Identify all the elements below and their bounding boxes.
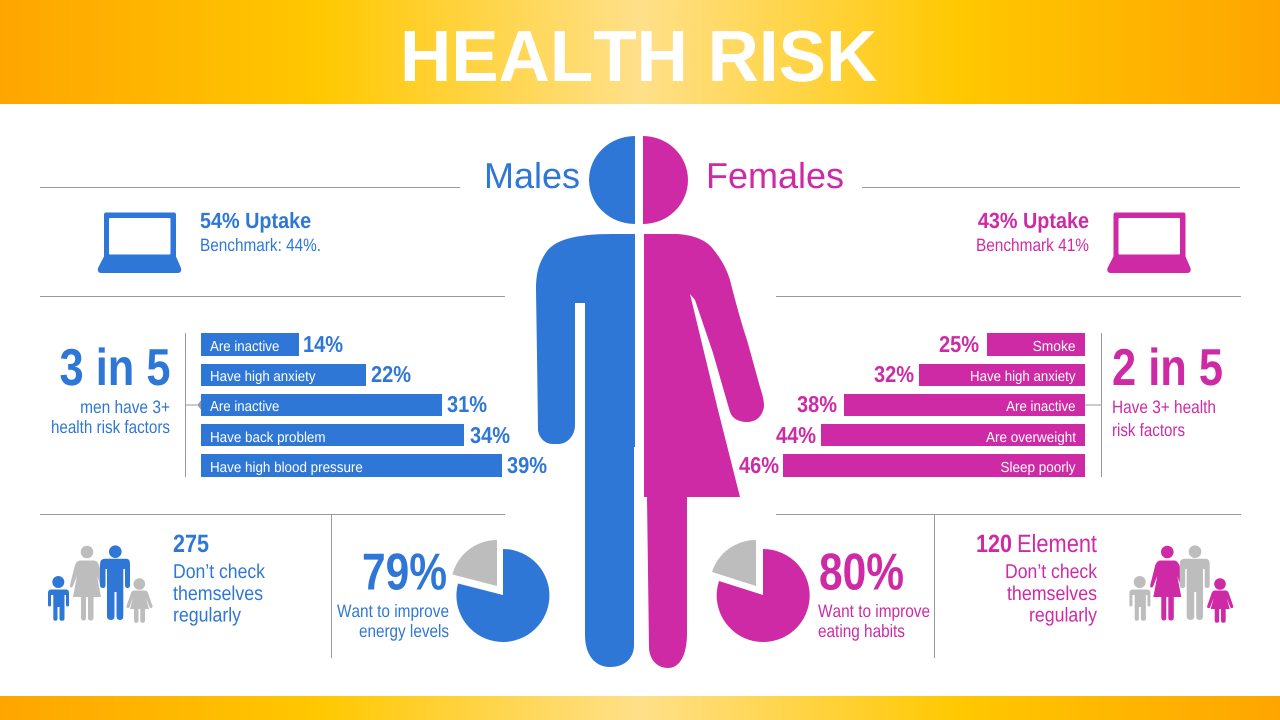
bar: back problem 34%: Have back problem bbox=[210, 430, 326, 446]
connector: female stat to bars bbox=[1085, 404, 1101, 406]
female 2 in 5: 2 in 5 bbox=[1112, 339, 1223, 397]
bar: sleep poorly 46% bbox=[739, 452, 1085, 478]
male pie value: 79% bbox=[362, 544, 447, 602]
bar: are overweight 44%: Are overweight bbox=[986, 430, 1076, 446]
male risk factor stat bbox=[51, 339, 170, 437]
male uptake block bbox=[98, 208, 321, 273]
female count value bbox=[976, 530, 1097, 558]
bar: high anxiety 32% bbox=[874, 361, 1085, 387]
female stat caption bbox=[1112, 397, 1216, 440]
bar: sleep poorly 46%: 46% bbox=[739, 452, 779, 478]
bar: are inactive 31%: 31% bbox=[447, 391, 487, 417]
male count caption: regularly bbox=[173, 604, 241, 626]
header banner bbox=[0, 0, 1280, 104]
female pie block bbox=[712, 540, 930, 642]
heading: Males: Males bbox=[484, 155, 580, 196]
bar: are inactive 38% bbox=[797, 391, 1085, 417]
bar chart: female risk factors bbox=[739, 331, 1085, 478]
female pie value: 80% bbox=[819, 544, 904, 602]
male pie caption: Want to improve bbox=[337, 601, 449, 621]
female count caption bbox=[1005, 561, 1098, 626]
bar: are inactive 31%: Are inactive bbox=[210, 399, 279, 415]
bar: high anxiety 32%: 32% bbox=[874, 361, 914, 387]
bar: high anxiety 22% bbox=[201, 361, 411, 387]
bar: are overweight 44%: 44% bbox=[776, 422, 816, 448]
female count caption: themselves bbox=[1007, 583, 1097, 605]
icon: male family bbox=[48, 545, 153, 623]
male 3 in 5: 3 in 5 bbox=[59, 339, 170, 397]
bar: back problem 34%: 34% bbox=[470, 422, 510, 448]
female count caption: regularly bbox=[1029, 604, 1097, 626]
icon: female laptop bbox=[1107, 212, 1191, 273]
female count caption: Don’t check bbox=[1005, 561, 1098, 583]
figure: female half bbox=[643, 136, 764, 668]
female risk factor stat bbox=[1112, 339, 1223, 440]
male count caption: themselves bbox=[173, 583, 263, 605]
bar: sleep poorly 46%: Sleep poorly bbox=[1001, 460, 1076, 476]
connector: male stat to bars bbox=[186, 401, 201, 409]
icon: female family bbox=[1129, 545, 1233, 623]
bar: high blood pressure 39%: 39% bbox=[507, 452, 547, 478]
bar: smoke 25%: Smoke bbox=[1033, 339, 1076, 355]
icon: male laptop bbox=[98, 212, 181, 273]
female benchmark: Benchmark 41% bbox=[976, 235, 1089, 255]
female count text block bbox=[976, 530, 1098, 626]
bar: are overweight 44% bbox=[776, 422, 1085, 448]
bar: are inactive 31% bbox=[201, 391, 487, 417]
male count text block bbox=[173, 530, 266, 626]
female uptake value: 43% Uptake bbox=[978, 208, 1089, 233]
female uptake block bbox=[976, 208, 1191, 273]
bar: high anxiety 22%: 22% bbox=[371, 361, 411, 387]
title: HEALTH RISK bbox=[400, 17, 877, 97]
bar: are inactive 14% bbox=[201, 331, 343, 357]
bar chart: male risk factors bbox=[201, 331, 547, 478]
bar: high anxiety 22%: Have high anxiety bbox=[210, 369, 316, 385]
male pie caption: energy levels bbox=[359, 621, 449, 641]
male count caption: Don’t check bbox=[173, 561, 266, 583]
male stat caption bbox=[51, 397, 170, 437]
male pie block bbox=[337, 540, 549, 642]
footer banner bbox=[0, 696, 1280, 720]
female pie caption: eating habits bbox=[818, 621, 905, 641]
bar: are inactive 38%: 38% bbox=[797, 391, 837, 417]
bar: are inactive 14%: Are inactive bbox=[210, 339, 279, 355]
bar: are inactive 14%: 14% bbox=[303, 331, 343, 357]
bar: high blood pressure 39% bbox=[201, 452, 547, 478]
female pie caption: Want to improve bbox=[818, 601, 930, 621]
male count caption bbox=[173, 561, 266, 626]
figure: male half bbox=[536, 136, 635, 667]
female stat caption: risk factors bbox=[1112, 420, 1185, 440]
bar: smoke 25% bbox=[939, 331, 1085, 357]
bar: high blood pressure 39%: Have high blood pressure bbox=[210, 460, 363, 476]
pie chart: female 80% bbox=[712, 540, 810, 642]
male stat caption: health risk factors bbox=[51, 417, 170, 437]
bar: high anxiety 32%: Have high anxiety bbox=[970, 369, 1076, 385]
bar: smoke 25%: 25% bbox=[939, 331, 979, 357]
female count value: Element bbox=[1017, 530, 1097, 558]
bar: are inactive 38%: Are inactive bbox=[1006, 399, 1076, 415]
male count 275: 275 bbox=[173, 530, 209, 558]
male benchmark: Benchmark: 44%. bbox=[200, 235, 321, 255]
male uptake value: 54% Uptake bbox=[200, 208, 311, 233]
pie chart: male 79% bbox=[452, 540, 549, 642]
male stat caption: men have 3+ bbox=[80, 397, 170, 417]
female pie caption bbox=[818, 601, 930, 641]
female count value: 120 bbox=[976, 530, 1012, 558]
male pie caption bbox=[337, 601, 449, 641]
bar: back problem 34% bbox=[201, 422, 510, 448]
heading: Females: Females bbox=[706, 155, 844, 196]
female stat caption: Have 3+ health bbox=[1112, 397, 1216, 417]
